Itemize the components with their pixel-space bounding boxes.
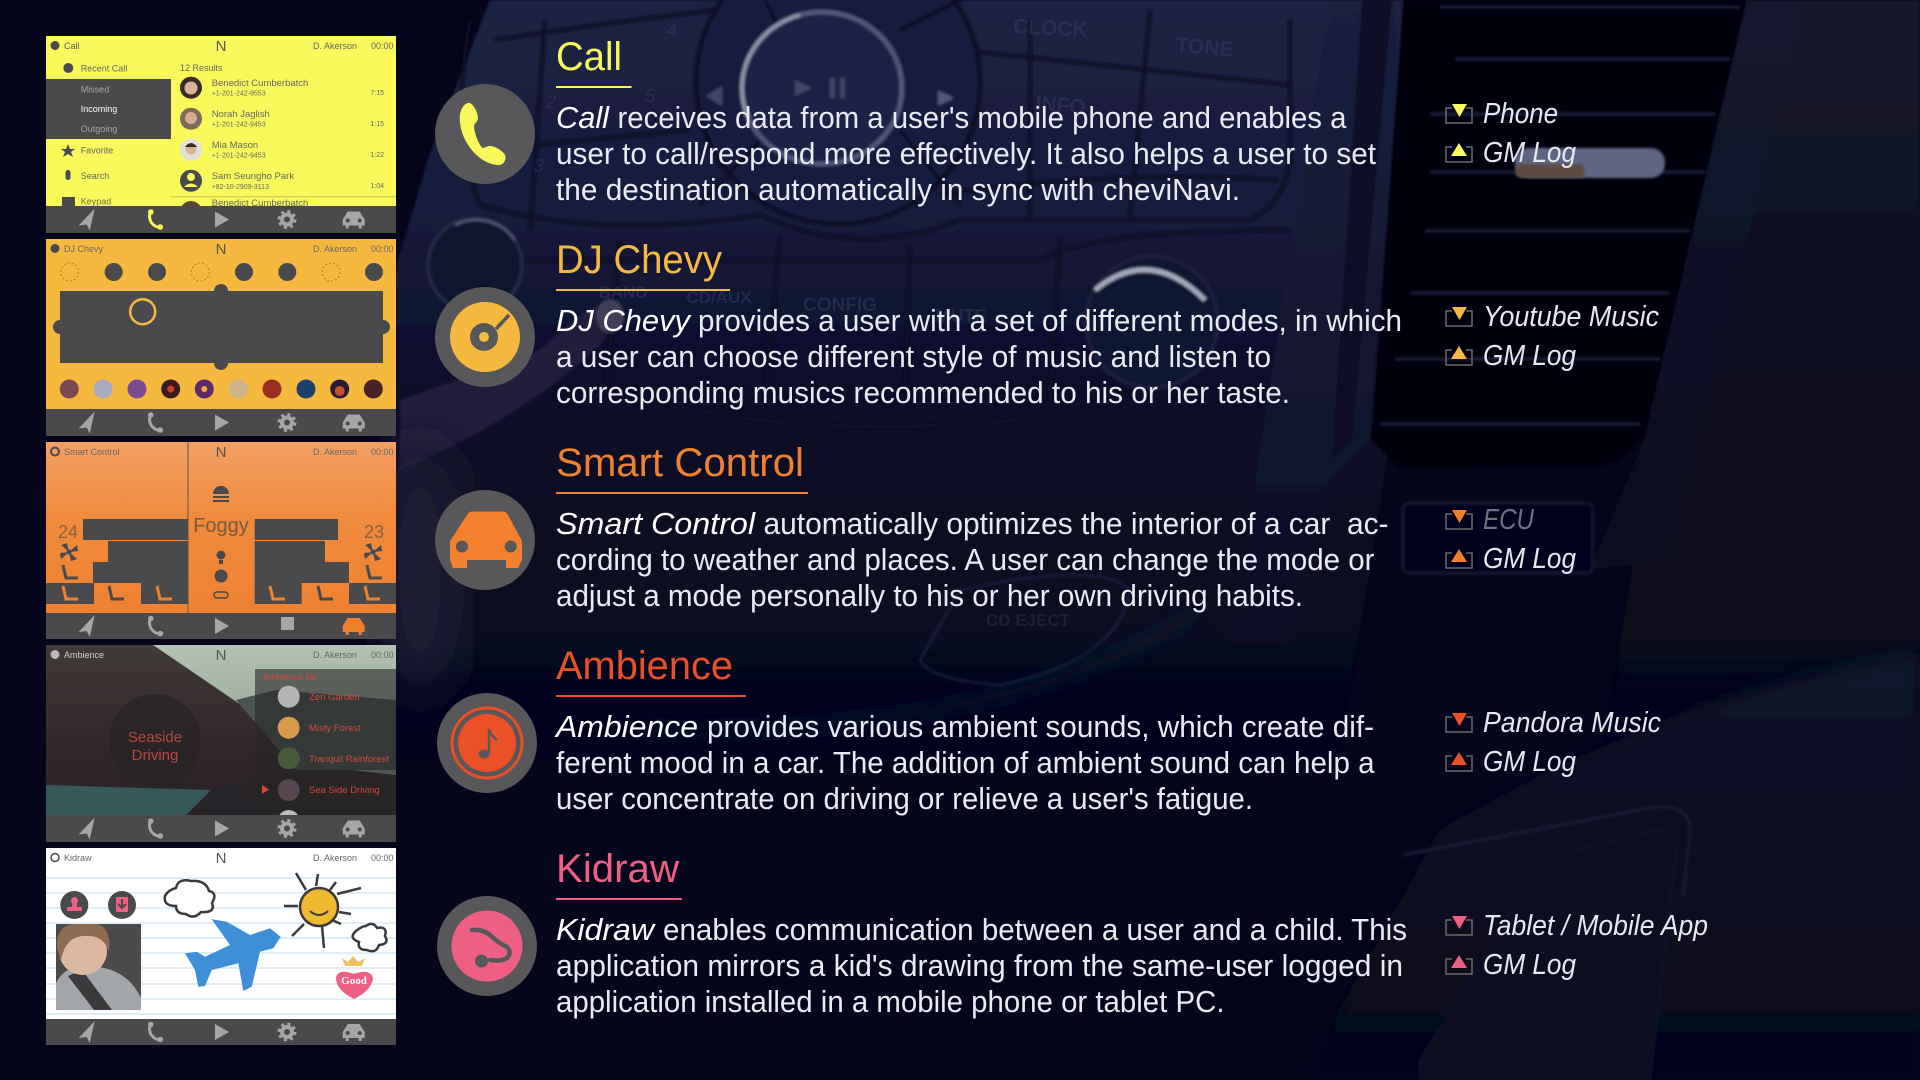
background: car dashboard photograph: BAND — [598, 283, 648, 302]
panel: Call app screenshot: Keypad — [81, 196, 111, 206]
panel: Ambience app screenshot: D. Akerson — [313, 650, 357, 660]
panel: Call app screenshot: 1:15 — [370, 121, 384, 128]
panel: Kidraw app screenshot: Good — [341, 975, 367, 987]
text block: Ambience description: ferent mood in a car. The addition of ambient sound can help a — [556, 745, 1375, 780]
background: car dashboard photograph: CD/AUX — [686, 288, 752, 307]
heading: DJ Chevy: DJ Chevy — [556, 238, 722, 282]
background: car dashboard photograph: CLOCK — [1012, 15, 1088, 42]
panel: Call app screenshot — [46, 36, 396, 233]
panel: Call app screenshot: N — [216, 38, 226, 55]
text block: Call description: receives data from a user's mobile phone and enables a — [618, 100, 1347, 135]
heading: Smart Control: Smart Control — [556, 441, 804, 485]
section: Ambience — [437, 644, 1375, 816]
data sources: DJ Chevy — [1446, 301, 1659, 372]
panel: Call app screenshot: Mia Mason — [212, 140, 258, 151]
background: car dashboard photograph: TONE — [1175, 34, 1234, 62]
icon: vinyl record — [435, 287, 535, 387]
panel: Call app screenshot: 00:00 — [371, 41, 394, 51]
data sources: Kidraw: Tablet / Mobile App — [1483, 910, 1708, 942]
panel: Ambience app screenshot — [46, 645, 396, 842]
panel: Call app screenshot: +1-201-242-9453 — [212, 122, 266, 128]
text block: Smart Control description: Smart Control — [556, 506, 756, 541]
panel: DJ Chevy app screenshot: 00:00 — [371, 244, 394, 254]
heading: Kidraw: Kidraw — [556, 847, 679, 891]
background: car dashboard photograph: MUTE — [936, 306, 986, 326]
background: car dashboard photograph: 5 — [645, 86, 656, 106]
panel: Ambience app screenshot: Tranquil Rainforest — [309, 754, 389, 765]
panel: DJ Chevy app screenshot — [46, 239, 396, 436]
icon: phone — [435, 84, 535, 184]
data sources: Smart Control: GM Log — [1483, 543, 1576, 575]
section: Kidraw — [437, 847, 1407, 1019]
panel: Call app screenshot: 12 Results — [180, 63, 223, 73]
panel: Call app screenshot: Outgoing — [81, 124, 117, 134]
panel: DJ Chevy app screenshot: D. Akerson — [313, 244, 357, 254]
panel: Call app screenshot: Benedict Cumberbatch — [212, 78, 308, 89]
data sources: Call: Phone — [1483, 98, 1558, 130]
heading: Call: Call — [556, 35, 622, 79]
panel: DJ Chevy app screenshot: N — [216, 241, 226, 258]
panel: Call app screenshot: Favorite — [81, 146, 113, 156]
text block: DJ Chevy description: corresponding musics recommended to his or her taste. — [556, 375, 1290, 410]
panel: Ambience app screenshot: Ambience list — [263, 672, 317, 682]
data sources: Smart Control — [1446, 504, 1576, 575]
panel: Call app screenshot: Sam Seungho Park — [212, 171, 294, 182]
panel: Smart Control app screenshot: 24 — [58, 522, 78, 542]
icon: scribble — [437, 896, 537, 996]
data sources: Smart Control: ECU — [1483, 504, 1535, 536]
panel: Kidraw app screenshot: 00:00 — [371, 853, 394, 863]
text block: Ambience description: Ambience — [554, 709, 698, 744]
panel: Ambience app screenshot: Ambience — [64, 650, 104, 660]
panel: Kidraw app screenshot: N — [216, 850, 226, 867]
section: Smart Control — [435, 441, 1388, 613]
data sources: Kidraw — [1446, 910, 1708, 981]
text block: Kidraw description: enables communication between a user and a child. This — [663, 912, 1407, 947]
text block: Smart Control description — [556, 506, 1388, 613]
panel: Ambience app screenshot: Seaside — [128, 729, 182, 746]
panel: Kidraw app screenshot: D. Akerson — [313, 853, 357, 863]
panel: Ambience app screenshot: 00:00 — [371, 650, 394, 660]
data sources: Ambience: GM Log — [1483, 746, 1576, 778]
panel: Call app screenshot: 1:04 — [370, 183, 384, 190]
data sources: Call — [1446, 98, 1576, 169]
panel: Smart Control app screenshot: Smart Control — [64, 447, 120, 457]
panel: Call app screenshot: Call — [64, 41, 80, 51]
panel: Call app screenshot: +1-201-242-9553 — [212, 90, 266, 98]
text block: DJ Chevy description: a user can choose different style of music and listen to — [556, 339, 1271, 374]
text block: Call description: user to call/respond more effectively. It also helps a user to set — [556, 136, 1376, 171]
text block: Ambience description: provides various ambient sounds, which create dif- — [707, 709, 1374, 744]
data sources: Kidraw: GM Log — [1483, 949, 1576, 981]
panel: Call app screenshot: Missed — [81, 84, 109, 94]
background: car dashboard photograph: INFO — [1035, 92, 1087, 119]
panel: Kidraw app screenshot: Kidraw — [64, 853, 92, 863]
text block: Call description: the destination automatically in sync with cheviNavi. — [556, 172, 1240, 207]
panel: Ambience app screenshot: Sea Side Driving — [309, 785, 380, 796]
panel: Smart Control app screenshot: 23 — [364, 522, 384, 542]
data sources: DJ Chevy: Youtube Music — [1483, 301, 1659, 333]
panel: Call app screenshot: +82-10-2909-3113 — [212, 184, 269, 191]
section: Call — [435, 35, 1376, 207]
text block: Kidraw description: Kidraw — [556, 912, 657, 947]
panel: Call app screenshot: Benedict Cumberbatch — [212, 198, 308, 209]
text block: DJ Chevy description — [556, 303, 1402, 410]
data sources: Call: GM Log — [1483, 137, 1576, 169]
icon: music note — [437, 693, 537, 793]
text block: Kidraw description: application installed in a mobile phone or tablet PC. — [556, 984, 1224, 1019]
icon: car — [435, 490, 535, 590]
text block: Call description: Call — [556, 100, 610, 135]
text block: DJ Chevy description: DJ Chevy — [556, 303, 692, 338]
text block: Kidraw description — [556, 912, 1407, 1019]
panel: Call app screenshot: +1-201-242-9453 — [212, 152, 266, 160]
panel: Call app screenshot: Recent Call — [81, 64, 127, 74]
panel: Call app screenshot: Norah Jaglish — [212, 109, 270, 120]
panel: Call app screenshot: D. Akerson — [313, 41, 357, 51]
panel: Smart Control app screenshot: D. Akerson — [313, 447, 357, 457]
data sources: DJ Chevy: GM Log — [1483, 340, 1576, 372]
panel: Ambience app screenshot: Misty Forest — [309, 723, 361, 734]
panel: Ambience app screenshot: N — [216, 647, 226, 664]
background: car dashboard photograph: CD EJECT — [986, 611, 1071, 630]
text block: Smart Control description: automatically optimizes the interior of a car ac- — [764, 506, 1388, 541]
data sources: Ambience: Pandora Music — [1483, 707, 1661, 739]
text block: Call description — [556, 100, 1376, 207]
panel: Ambience app screenshot: Zen Garden — [309, 692, 360, 703]
background: car dashboard photograph: 3 — [534, 156, 544, 176]
panel: Ambience app screenshot: Driving — [132, 747, 178, 764]
panel: Smart Control app screenshot: N — [216, 444, 226, 461]
text block: Ambience description — [554, 709, 1375, 816]
panel: Call app screenshot: 1:22 — [370, 152, 384, 159]
background: car dashboard photograph: 4 — [667, 20, 677, 40]
section: DJ Chevy — [435, 238, 1402, 410]
data sources: Ambience — [1446, 707, 1661, 778]
text block: Kidraw description: application mirrors a kid's drawing from the same-user logged in — [556, 948, 1403, 983]
panel: Call app screenshot: 7:15 — [370, 90, 384, 97]
background: car dashboard photograph: CONFIG — [803, 295, 877, 316]
text block: Smart Control description: cording to weather and places. A user can change the mode or — [556, 542, 1374, 577]
panel: Call app screenshot: Incoming — [81, 104, 117, 114]
text block: DJ Chevy description: provides a user with a set of different modes, in which — [698, 303, 1402, 338]
panel: Smart Control app screenshot: Foggy — [193, 515, 249, 537]
panel: Smart Control app screenshot — [46, 442, 396, 639]
heading: Ambience: Ambience — [556, 644, 733, 688]
text block: Ambience description: user concentrate on driving or relieve a user's fatigue. — [556, 781, 1253, 816]
panel: Call app screenshot: Search — [81, 171, 109, 181]
panel: DJ Chevy app screenshot: DJ Chevy — [64, 244, 104, 254]
panel: Kidraw app screenshot — [46, 848, 396, 1045]
panel: Smart Control app screenshot: 00:00 — [371, 447, 394, 457]
text block: Smart Control description: adjust a mode personally to his or her own driving habits. — [556, 578, 1303, 613]
background: car dashboard photograph: 2 — [545, 92, 556, 112]
